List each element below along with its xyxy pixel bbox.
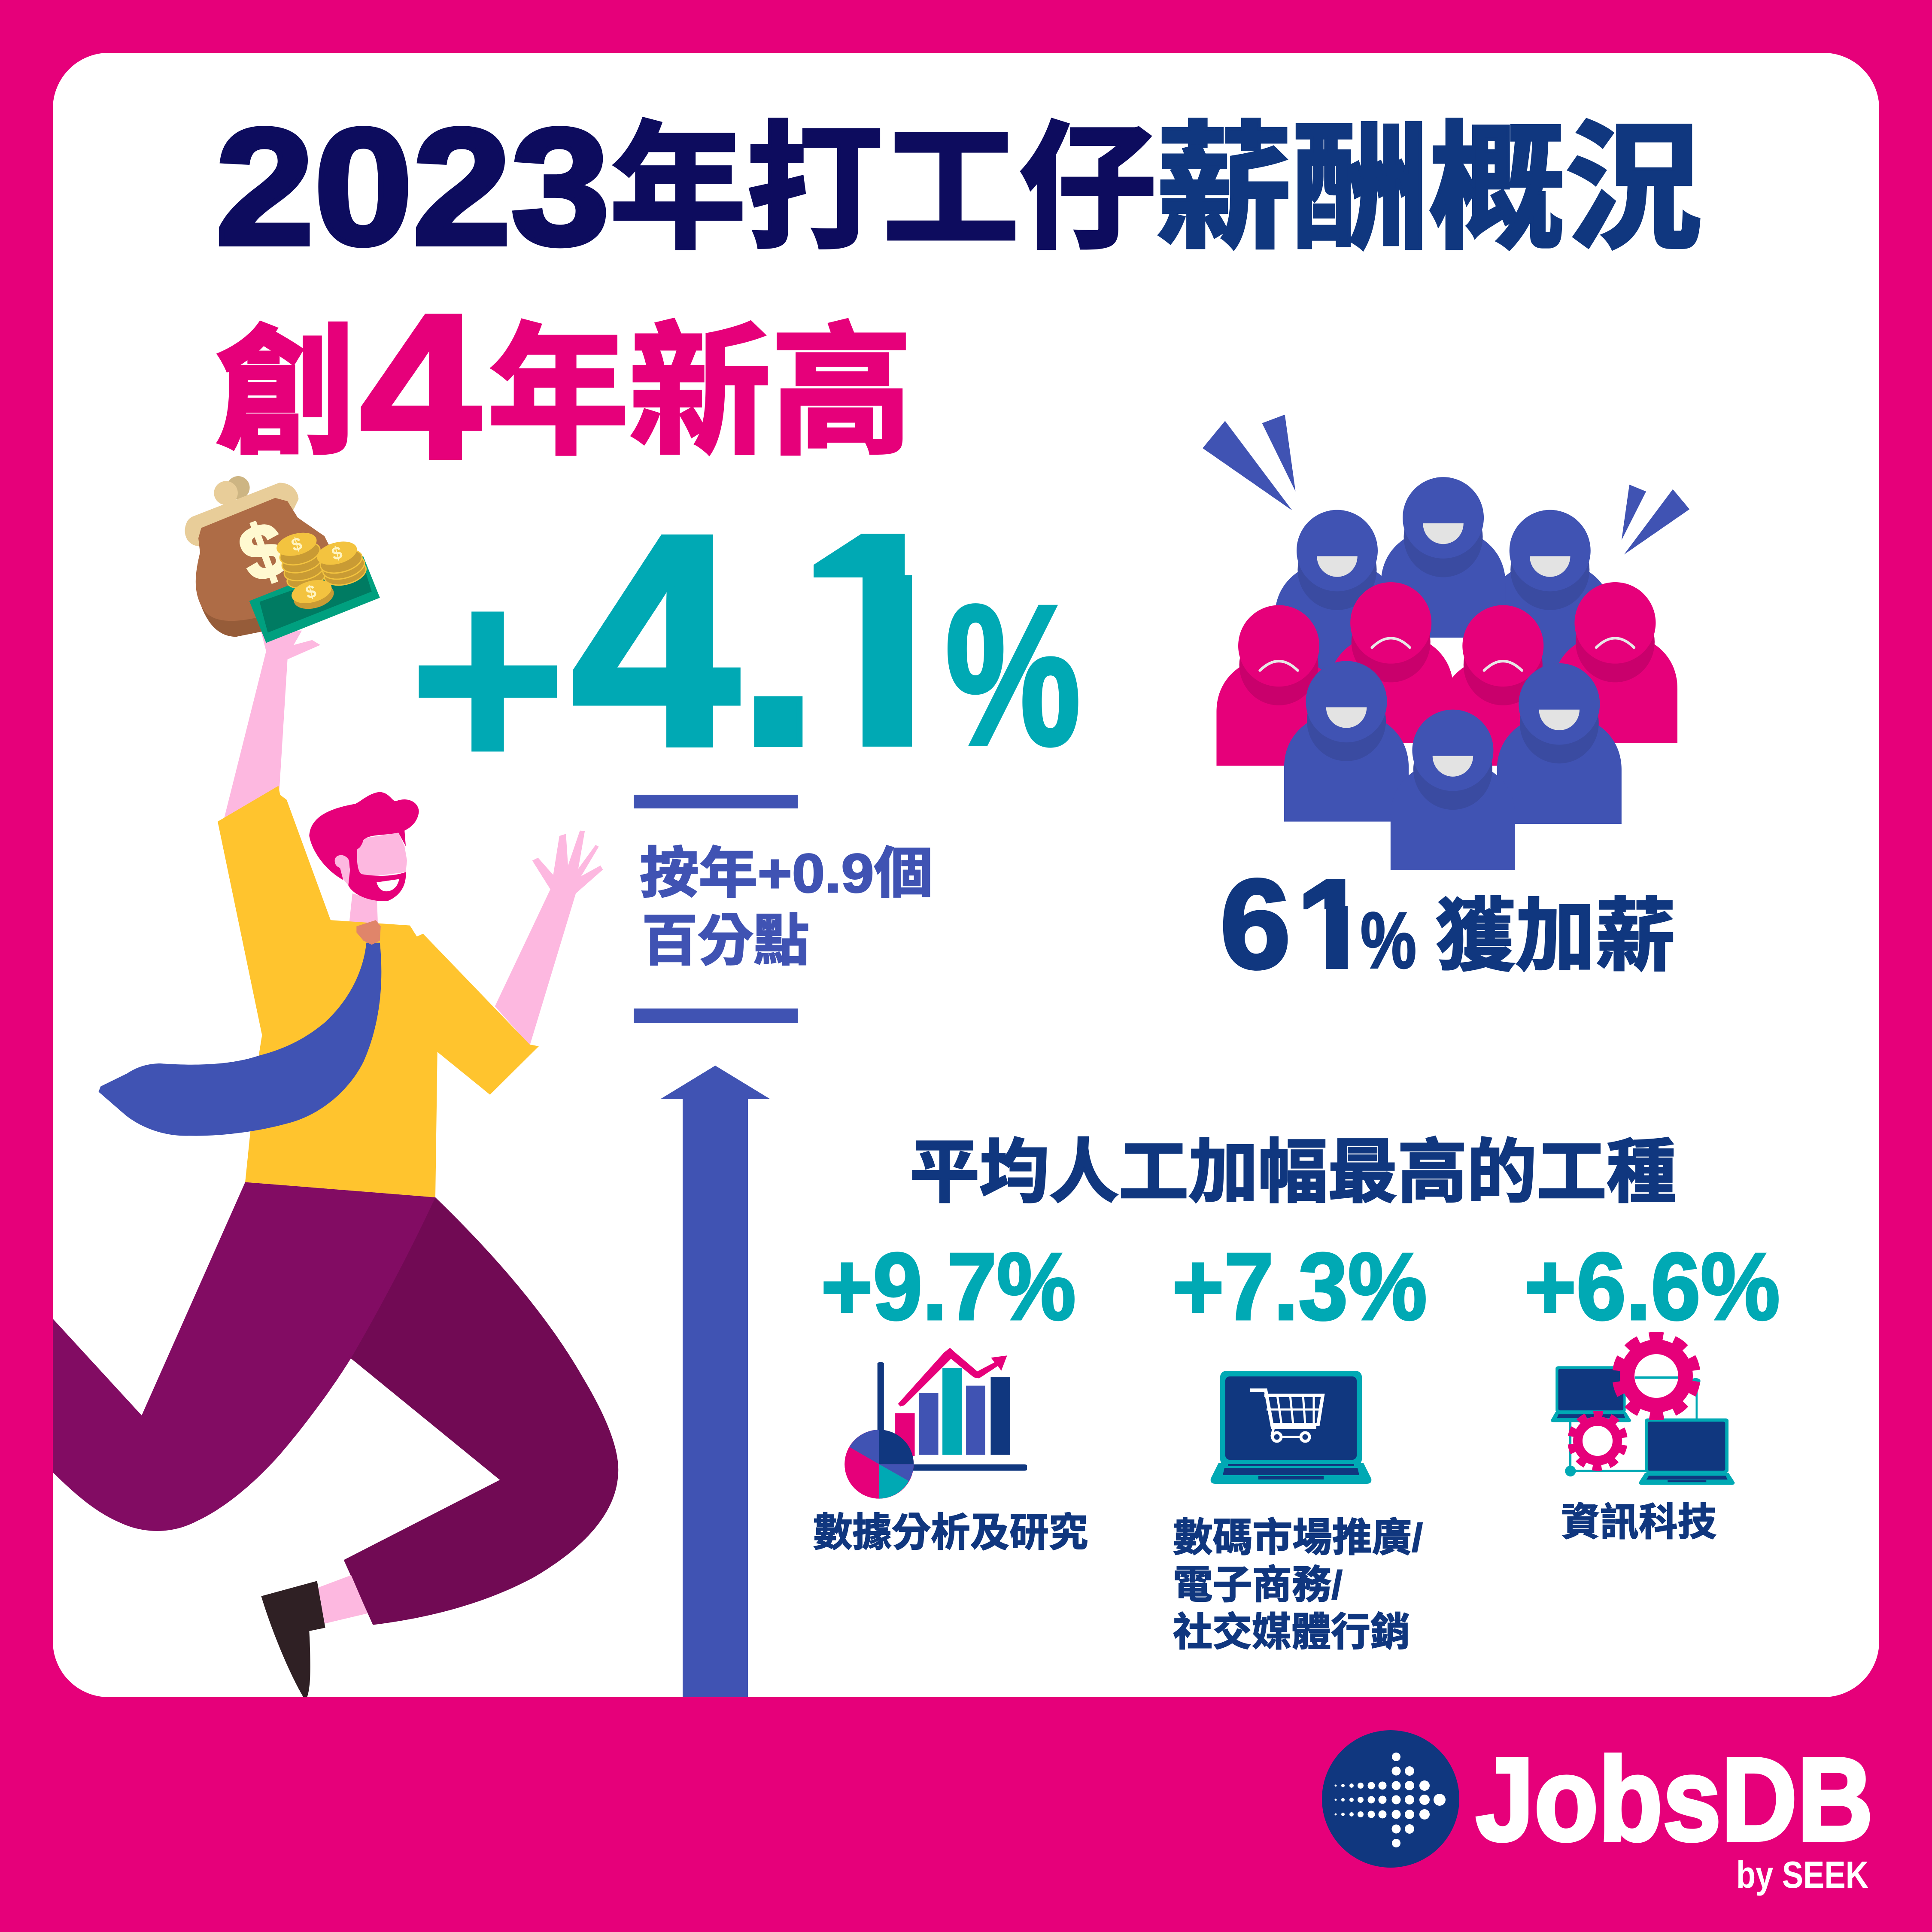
stat: 61% got a raise: 獲加薪 [1435, 891, 1676, 981]
label: 數碼市場推廣/ [1173, 1516, 1423, 1560]
back leg [344, 1197, 618, 1625]
raised arm [224, 631, 320, 820]
big number +4.1% [409, 472, 1081, 829]
big number +4.1%: 1 [790, 472, 957, 808]
purse: $ [229, 504, 298, 599]
subtitle [216, 271, 912, 501]
ear [335, 855, 350, 885]
subtitle: 4 [360, 271, 482, 501]
title: 年打工仔 [610, 112, 1156, 265]
big number +4.1%: 4 [572, 474, 740, 807]
percentage 9.7: +9.7% [821, 1233, 1076, 1340]
big number +4.1%: . [737, 472, 820, 808]
divider top [634, 795, 798, 808]
tie [99, 943, 381, 1136]
stat: 61% got a raise: % [1361, 896, 1416, 985]
hair and beard [309, 792, 419, 901]
job 2: digital marketing [1172, 1233, 1427, 1654]
shirt [218, 786, 539, 1197]
icon: laptop cart [1211, 1371, 1371, 1484]
sock [318, 1575, 368, 1624]
year-on-year note: 按年+0.9個 [640, 843, 933, 904]
job 1: data analytics [813, 1233, 1088, 1555]
job 3: IT [1524, 1233, 1780, 1544]
logo circle with dots [1322, 1730, 1459, 1868]
label: 社交媒體行銷 [1173, 1610, 1410, 1654]
label: 電子商務/ [1173, 1563, 1343, 1607]
illustration: jumping man with purse: $ [329, 542, 344, 564]
title: 薪酬概況 [1156, 112, 1702, 265]
icon: charts [844, 1348, 1027, 1499]
face [356, 832, 407, 878]
front leg [41, 1182, 435, 1531]
title [216, 94, 1702, 279]
year-on-year note [640, 843, 933, 972]
stat: 61% got a raise: 6 [1220, 853, 1291, 995]
illustration: jumping man with purse: $ [304, 581, 318, 603]
icon: laptops and gears [1551, 1337, 1735, 1485]
emphasis spikes [1203, 415, 1689, 555]
heading: top raises: 平均人工加幅最高的工種 [910, 1133, 1676, 1211]
percentage 6.6: +6.6% [1524, 1233, 1780, 1340]
neck [349, 893, 378, 924]
coins: $ [289, 533, 304, 555]
mouth [377, 879, 399, 891]
illustration: jumping man with purse [41, 476, 618, 1697]
big number +4.1%: % [945, 564, 1081, 787]
crowd icon [1203, 415, 1689, 870]
lowered hand and arm [495, 831, 603, 1045]
purse [185, 476, 333, 637]
banknote [249, 556, 380, 643]
subtitle: 創 [216, 315, 355, 471]
label: 數據分析及研究 [813, 1511, 1088, 1555]
year-on-year note: 百分點 [642, 909, 809, 972]
big number +4.1%: + [409, 527, 567, 829]
arrow up [660, 1066, 770, 1697]
stat: 61% got a raise [1220, 853, 1676, 995]
wordmark: JobsDB [1476, 1733, 1873, 1865]
happy back row [1275, 477, 1612, 671]
coins [274, 529, 329, 592]
by SEEK: by SEEK [1736, 1853, 1868, 1896]
divider bottom [634, 1009, 798, 1023]
label [1173, 1516, 1423, 1654]
logo: JobsDB by SEEK [1322, 1730, 1873, 1896]
subtitle: 年新高 [487, 313, 912, 471]
sad middle row [1216, 582, 1677, 766]
title: 2023 [216, 94, 610, 279]
happy front row [1284, 661, 1622, 870]
label: 資訊科技 [1561, 1501, 1716, 1544]
shoe [261, 1581, 325, 1697]
percentage 7.3: +7.3% [1172, 1233, 1427, 1340]
stat: 61% got a raise: 1 [1297, 853, 1367, 995]
tie knot [356, 920, 381, 945]
